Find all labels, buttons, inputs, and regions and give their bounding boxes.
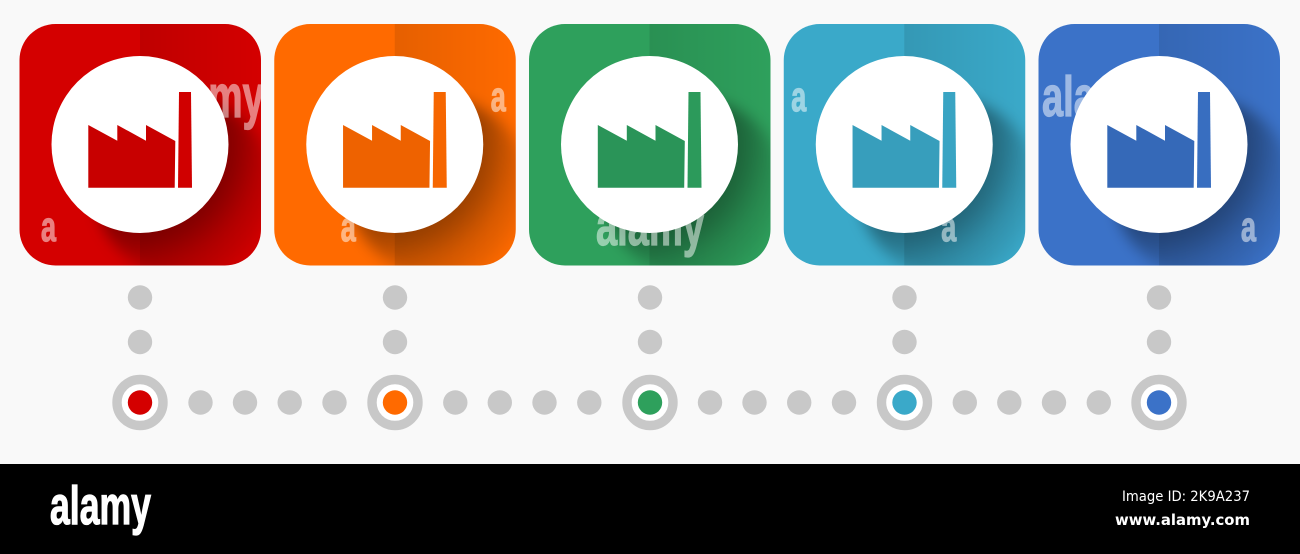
connector: horizontal dots xyxy=(188,390,1111,415)
icon: red factory xyxy=(88,92,192,188)
panel: red factory card xyxy=(20,24,274,278)
image id: Image ID: 2K9A237 xyxy=(1122,489,1250,505)
marker: blue xyxy=(1136,380,1182,426)
panel: green factory card: alamy xyxy=(596,194,704,258)
website: www.alamy.com xyxy=(1115,511,1250,529)
panel: red factory card: lamy xyxy=(176,63,264,130)
marker: red xyxy=(117,380,163,426)
panel: blue factory card: alamy xyxy=(1042,65,1150,129)
panel: green factory card xyxy=(529,24,784,278)
marker: orange xyxy=(372,380,418,426)
panel: red factory card: a xyxy=(41,203,56,250)
alamy logo: alamy xyxy=(50,476,151,536)
icon: green factory xyxy=(598,92,702,188)
panel: teal factory card xyxy=(784,24,1038,278)
panel: teal factory card: a xyxy=(941,203,957,250)
panel: teal factory card: a xyxy=(791,73,807,120)
panel: orange factory card: a xyxy=(491,73,506,120)
icon: orange factory xyxy=(343,92,447,188)
connector: vertical dots xyxy=(128,285,1171,354)
icon: blue factory xyxy=(1107,92,1211,188)
footer band xyxy=(0,464,1300,554)
panel: orange factory card xyxy=(274,24,529,278)
panel: orange factory card: a xyxy=(341,203,356,250)
panel: blue factory card: a xyxy=(1241,203,1256,250)
icon: teal factory xyxy=(853,92,956,188)
marker: green xyxy=(627,380,673,426)
panel: blue factory card xyxy=(1038,24,1293,278)
marker: teal xyxy=(882,380,928,426)
